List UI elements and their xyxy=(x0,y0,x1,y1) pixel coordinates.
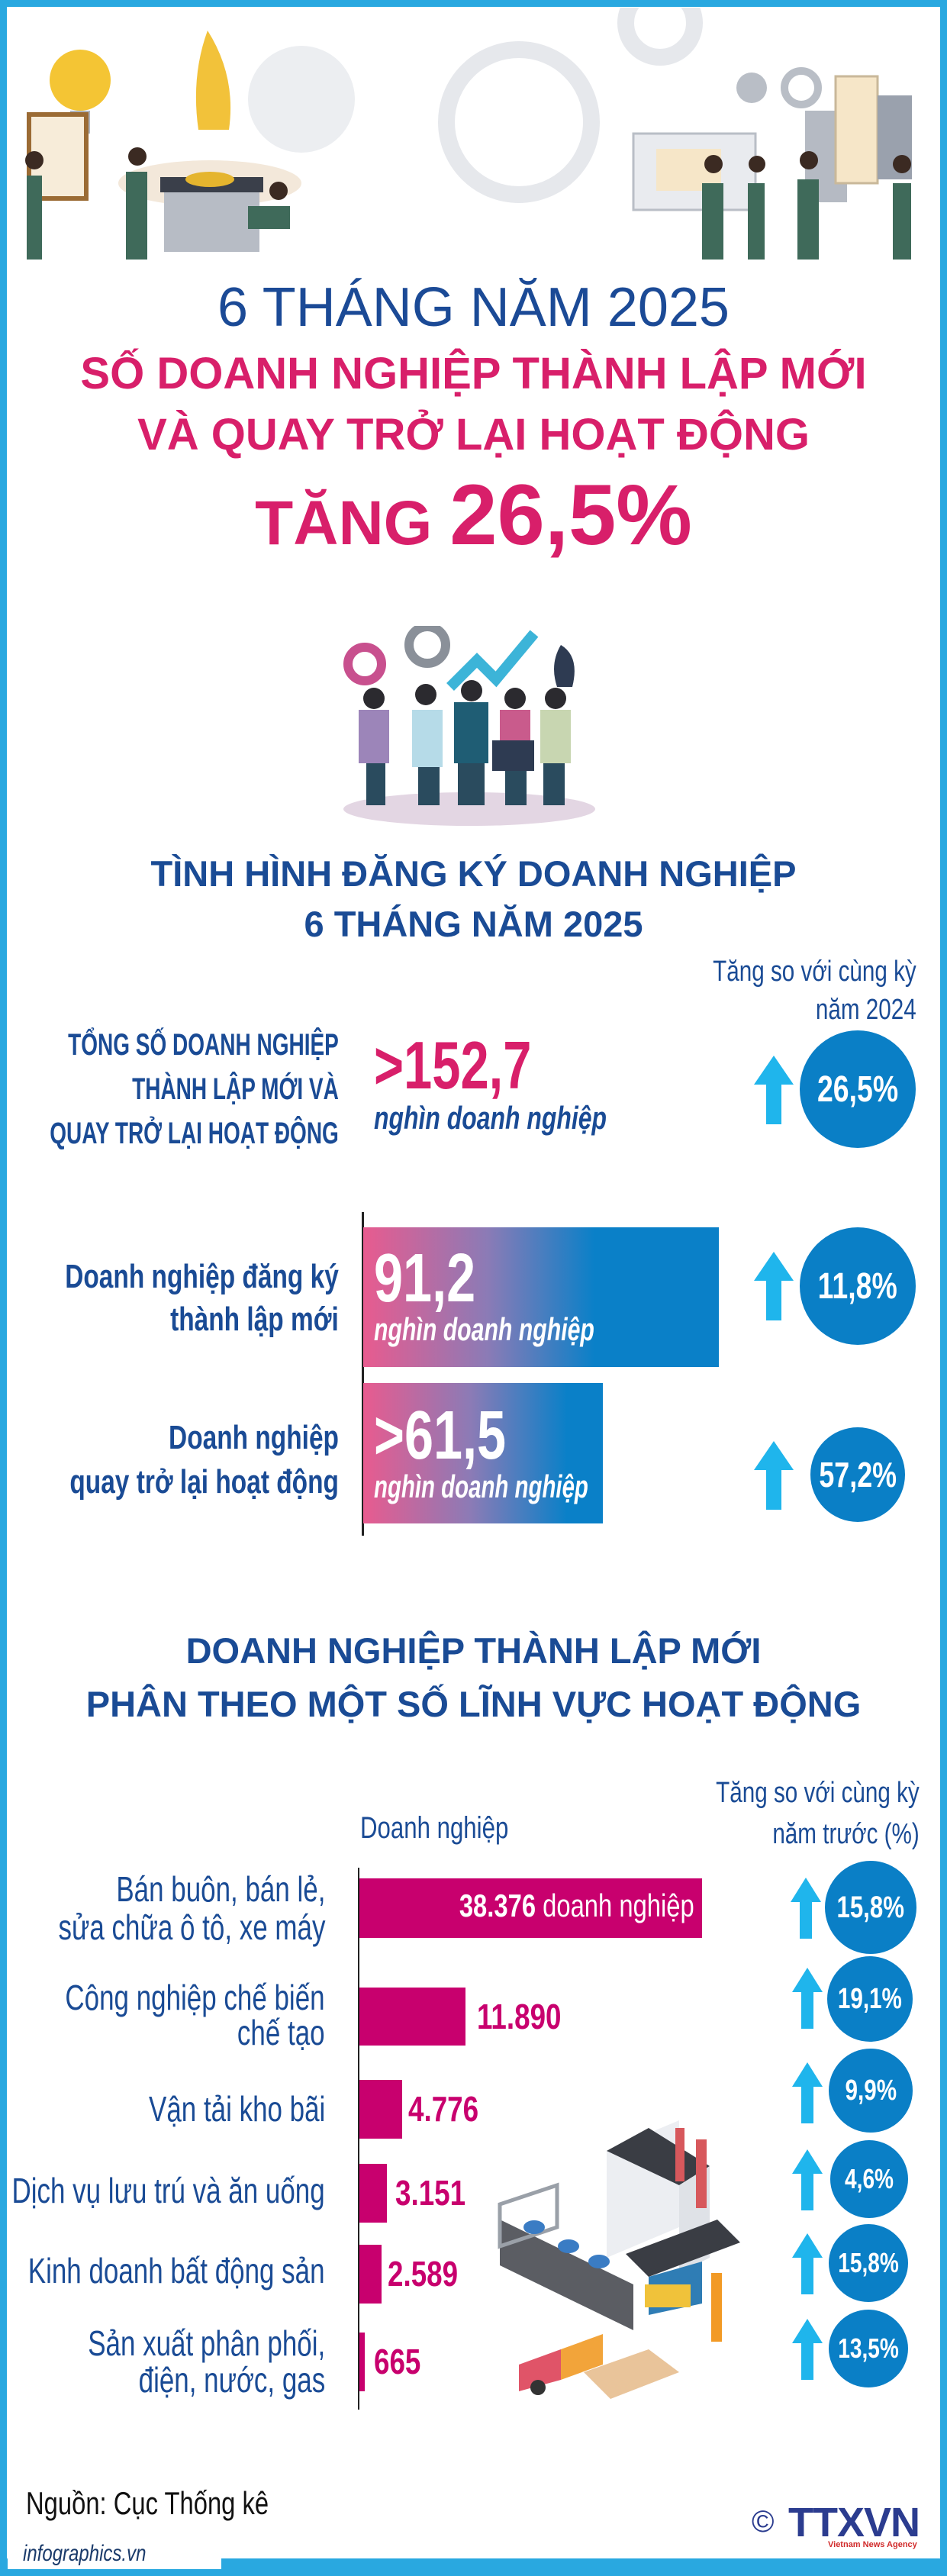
bar 91,2: 91,2 xyxy=(374,1240,475,1317)
column header: growth vs 2024 xyxy=(713,956,916,1026)
column header: growth vs prior year: Tăng so với cùng kỳ xyxy=(716,1777,920,1809)
growth circles and arrows: 9,9% xyxy=(845,2075,897,2107)
value: total xyxy=(374,1027,607,1136)
row: total: QUAY TRỞ LẠI HOẠT ĐỘNG xyxy=(50,1117,339,1150)
heading: registration status: TÌNH HÌNH ĐĂNG KÝ DOANH NGHIỆP xyxy=(150,853,797,894)
arrow 3 xyxy=(754,1441,794,1510)
label: new registrations: thành lập mới xyxy=(170,1301,339,1338)
column header: growth vs 2024: Tăng so với cùng kỳ xyxy=(713,956,916,988)
top illustration: startup team xyxy=(25,8,912,260)
value: total: nghìn doanh nghiệp xyxy=(374,1100,607,1136)
circle 11,8%: 11,8% xyxy=(818,1265,897,1307)
bar 61,5: nghìn doanh nghiệp xyxy=(374,1469,588,1504)
title block: TĂNG 26,5% xyxy=(255,467,692,563)
growth circles and arrows: 19,1% xyxy=(838,1983,902,2015)
row: total: TỔNG SỐ DOANH NGHIỆP xyxy=(68,1028,339,1062)
circle 26,5%: 26,5% xyxy=(817,1069,898,1110)
row: total: THÀNH LẬP MỚI VÀ xyxy=(132,1072,339,1106)
label: new registrations xyxy=(65,1258,339,1338)
label: returning xyxy=(69,1419,339,1501)
logo TTXVN: Vietnam News Agency xyxy=(828,2540,917,2549)
text: chế tạo xyxy=(237,2013,325,2052)
bars xyxy=(359,1878,702,1938)
bar 91,2 xyxy=(363,1227,719,1367)
illustration: team with growth arrow xyxy=(343,626,595,826)
text: 3.151 xyxy=(395,2173,465,2213)
item 4,6% xyxy=(792,2149,823,2210)
growth circles and arrows: 15,8% xyxy=(837,1890,904,1923)
heading: by sector: DOANH NGHIỆP THÀNH LẬP MỚI xyxy=(186,1630,761,1671)
circle 57,2% xyxy=(810,1427,905,1522)
label: new registrations: Doanh nghiệp đăng ký xyxy=(65,1258,339,1295)
label: returning: quay trở lại hoạt động xyxy=(69,1463,339,1501)
growth circles and arrows: 4,6% xyxy=(845,2163,894,2194)
circle 26,5% xyxy=(800,1030,916,1148)
circle 11,8% xyxy=(800,1227,916,1345)
logo TTXVN: TTXVN xyxy=(788,2500,920,2545)
item 15,8% xyxy=(791,1878,821,1939)
heading: registration status: 6 THÁNG NĂM 2025 xyxy=(304,904,643,944)
text: Sản xuất phân phối, xyxy=(88,2323,325,2363)
heading: by sector: PHÂN THEO MỘT SỐ LĨNH VỰC HOẠT ĐỘNG xyxy=(86,1684,861,1724)
title block: SỐ DOANH NGHIỆP THÀNH LẬP MỚI xyxy=(80,349,867,398)
sector labels: Bán buôn, bán lẻ, xyxy=(116,1869,325,1909)
title block xyxy=(80,277,867,563)
item 9,9% xyxy=(792,2062,823,2123)
column header: enterprises: Doanh nghiệp xyxy=(360,1811,508,1845)
bar 61,5: >61,5 xyxy=(374,1398,506,1474)
heading: registration status xyxy=(150,853,797,944)
logo TTXVN: © xyxy=(752,2505,774,2539)
source: Nguồn: Cục Thống kê xyxy=(26,2485,269,2521)
item 15,8% b xyxy=(792,2233,823,2294)
value: total: >152,7 xyxy=(374,1027,531,1103)
axis line xyxy=(362,1212,364,1536)
row: total xyxy=(50,1027,339,1150)
arrow 2 xyxy=(754,1252,794,1320)
text: 4.776 xyxy=(408,2089,478,2129)
text: Vận tải kho bãi xyxy=(149,2089,325,2129)
growth circles and arrows xyxy=(791,1861,916,2387)
text: điện, nước, gas xyxy=(138,2360,325,2400)
item 13,5% xyxy=(792,2319,823,2380)
bar 61,5 xyxy=(363,1383,603,1523)
column header: growth vs prior year: năm trước (%) xyxy=(773,1818,920,1850)
sector labels xyxy=(58,1869,325,1947)
text: Dịch vụ lưu trú và ăn uống xyxy=(12,2171,325,2210)
item 19,1% xyxy=(792,1968,823,2029)
heading: by sector xyxy=(86,1630,861,1724)
text: Công nghiệp chế biến xyxy=(66,1978,325,2017)
text: 11.890 xyxy=(477,1997,562,2036)
column header: growth vs 2024: năm 2024 xyxy=(816,994,916,1026)
text: 2.589 xyxy=(388,2254,458,2294)
circle 57,2%: 57,2% xyxy=(819,1455,897,1494)
website tab: infographics.vn xyxy=(23,2541,146,2566)
text: 665 xyxy=(374,2342,420,2381)
factory illustration xyxy=(498,2120,740,2399)
text: Kinh doanh bất động sản xyxy=(28,2251,325,2291)
growth circles and arrows: 15,8% xyxy=(838,2247,899,2278)
arrow 1 xyxy=(754,1056,794,1124)
bar 91,2: nghìn doanh nghiệp xyxy=(374,1311,594,1347)
title block: 6 THÁNG NĂM 2025 xyxy=(217,277,730,338)
sector labels: sửa chữa ô tô, xe máy xyxy=(58,1907,325,1947)
axis line 2 xyxy=(358,1868,359,2410)
title block: VÀ QUAY TRỞ LẠI HOẠT ĐỘNG xyxy=(137,410,810,459)
website tab xyxy=(8,2539,221,2569)
column header: growth vs prior year xyxy=(716,1777,920,1850)
growth circles and arrows: 13,5% xyxy=(838,2333,899,2364)
bars: 38.376 doanh nghiệp xyxy=(459,1888,694,1923)
label: returning: Doanh nghiệp xyxy=(169,1419,339,1456)
